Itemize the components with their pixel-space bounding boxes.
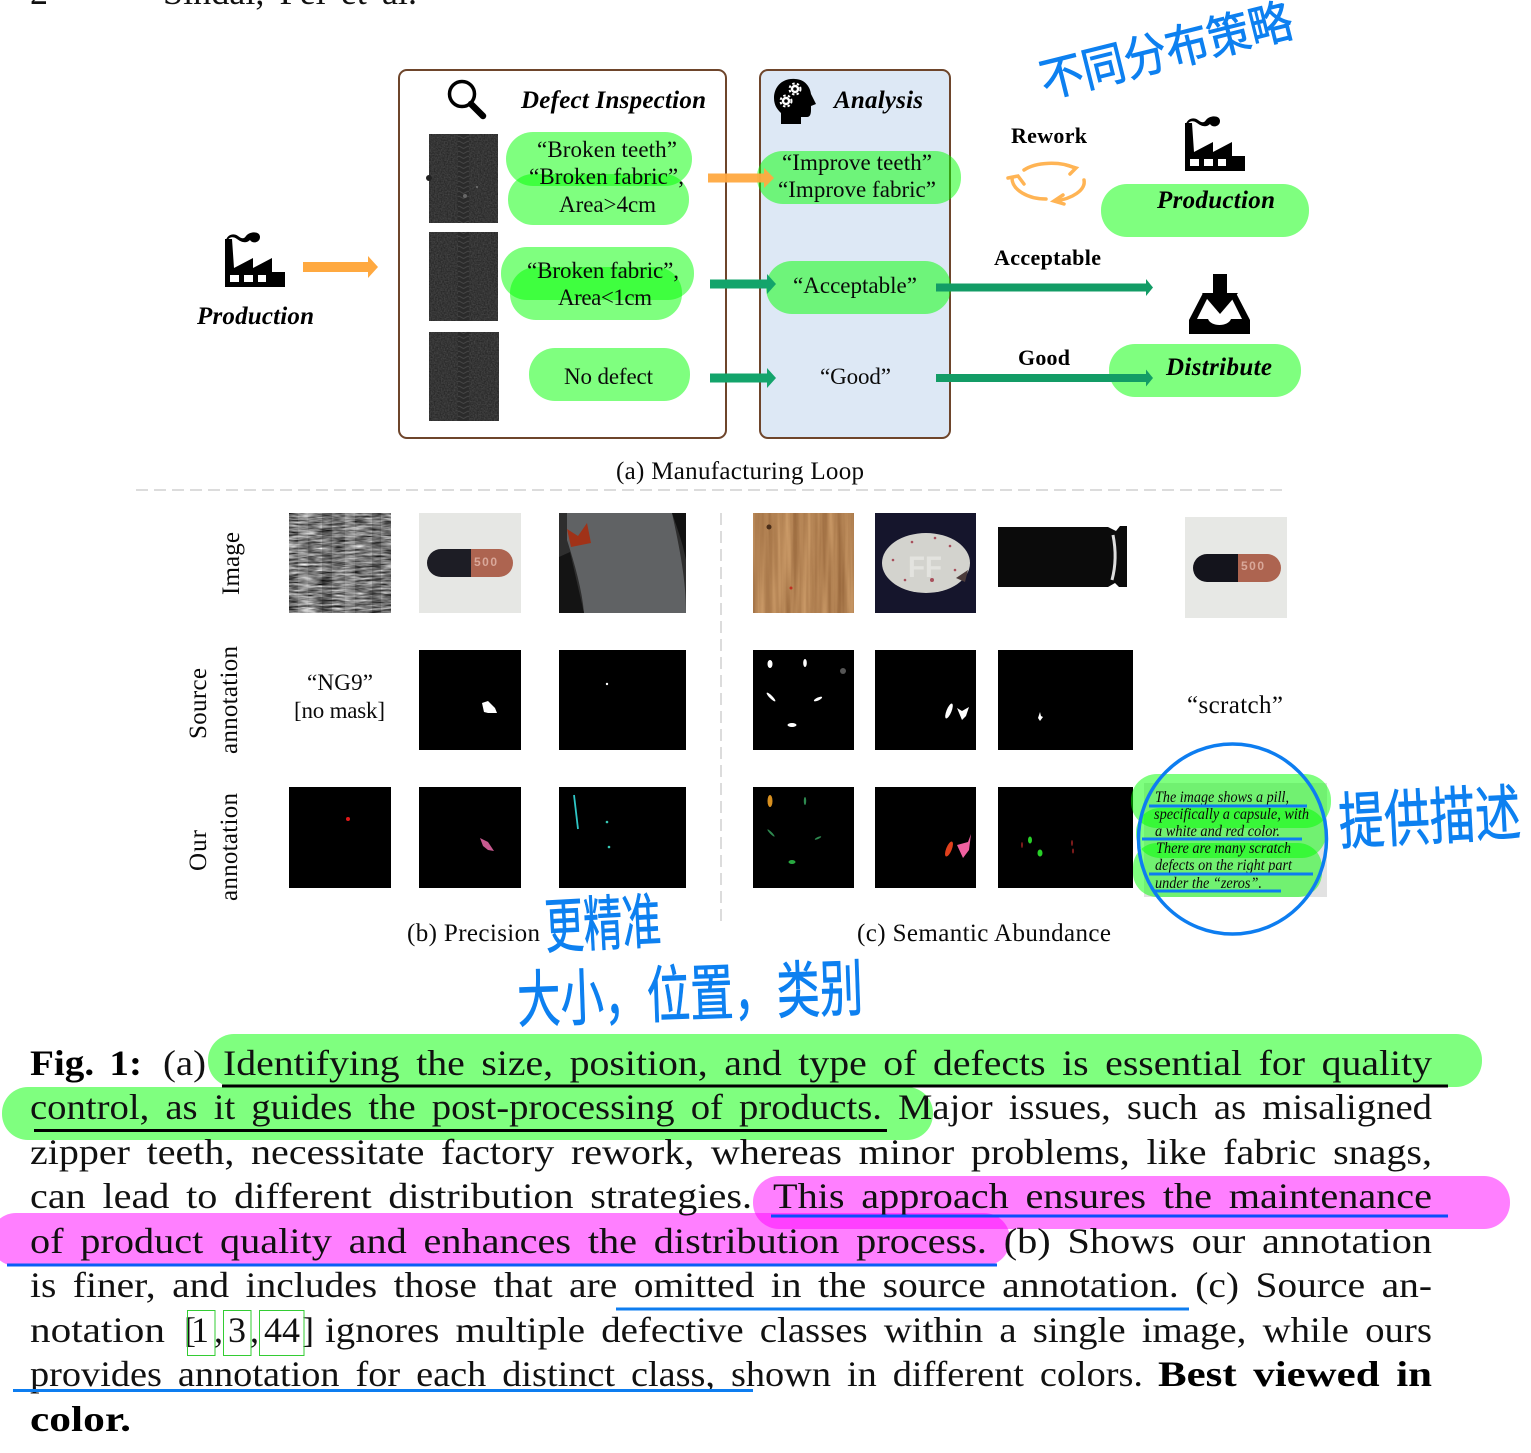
figure caption text: control, as it guides the post-processing of products. Major issues, such as misaligned [30, 1087, 1432, 1127]
analysis text: good: “Good” [820, 364, 891, 389]
figure caption text: 3 [228, 1310, 246, 1350]
image: capsule [419, 513, 521, 613]
arrow: inspection to improve [708, 168, 774, 188]
mask: fabric ours [289, 787, 391, 888]
finding text: broken teeth and fabric: Area>4cm [559, 192, 656, 217]
row labels [185, 532, 245, 901]
figure caption text: ignores multiple defective classes within a single image, while ours [325, 1310, 1432, 1350]
description underlines [1142, 806, 1313, 891]
arrow: acceptable to distribute [936, 279, 1153, 296]
heading: defect inspection: Defect Inspection [520, 87, 706, 114]
label: distribute: Distribute [1165, 354, 1272, 381]
finding text: broken teeth and fabric: “Broken teeth” [537, 137, 677, 162]
mask: tablet source [875, 650, 976, 750]
image: fabric texture [289, 513, 391, 613]
callout: generated description [1131, 744, 1331, 934]
highlight: improve [757, 151, 961, 204]
figure caption text: Identifying the size, position, and type of defects is essential for quality [223, 1043, 1432, 1083]
analysis text: improve: “Improve fabric” [778, 177, 936, 202]
image: zipper broken fabric [429, 232, 498, 321]
finding text: broken teeth and fabric: “Broken fabric”, [529, 164, 684, 189]
figure caption text: notation [30, 1310, 165, 1350]
analysis text: improve [778, 150, 936, 202]
running header [30, 0, 417, 12]
figure caption text: [ [184, 1310, 196, 1350]
handwritten note: size position type: 大小，位置，类别 [515, 938, 864, 1040]
icon: distribute inbox [1189, 274, 1250, 334]
handwritten note: more precise: 更精准 [542, 873, 663, 966]
source text: ng9 no mask [294, 670, 385, 723]
figure caption text: This approach ensures the maintenance [773, 1176, 1432, 1216]
figure caption text: , [250, 1310, 259, 1350]
finding text: broken fabric small: Area<1cm [558, 285, 652, 310]
finding text: no defect: No defect [564, 364, 654, 389]
figure caption text [30, 1043, 1432, 1439]
caption: precision: (b) Precision [407, 920, 540, 947]
figure caption text: (a) [163, 1043, 206, 1083]
figure caption text: Best viewed in [1158, 1354, 1432, 1394]
figure caption text: ] [302, 1310, 314, 1350]
mask: bottle source [998, 650, 1133, 750]
arrow: production to inspection [303, 256, 378, 278]
mask: wood source [753, 650, 854, 750]
icon: factory [225, 232, 285, 287]
image: capsule close-up: 500 [1241, 559, 1266, 573]
panel: production source [196, 232, 378, 330]
description text [1154, 789, 1309, 892]
finding text: broken fabric small: “Broken fabric”, [527, 258, 679, 283]
icon: head with gears [774, 79, 816, 124]
highlight: acceptable [766, 261, 951, 314]
mask: bottle ours [998, 787, 1133, 888]
description text: specifically a capsule, with [1154, 806, 1309, 823]
finding text: broken teeth and fabric [529, 137, 684, 217]
icon: rework loop [1008, 163, 1084, 204]
label: rework: Rework [1011, 123, 1088, 148]
image: zipper broken teeth [426, 134, 498, 223]
description text: The image shows a pill, [1155, 789, 1289, 806]
highlight: no defect [529, 348, 690, 401]
row labels: Image [218, 532, 245, 595]
source text: ng9 no mask: “NG9” [307, 670, 373, 695]
label: good: Good [1018, 345, 1070, 370]
caption: manufacturing loop: (a) Manufacturing Loop [616, 458, 864, 485]
image: tablet: FF [908, 551, 942, 584]
image: zipper no defect [429, 332, 499, 421]
figure caption text: , [214, 1310, 223, 1350]
arrow: good to distribute [936, 370, 1153, 386]
circle around description [1138, 744, 1326, 934]
image: black bottle [998, 526, 1127, 587]
caption underlines [7, 1086, 1448, 1390]
arrow: inspection to good [710, 368, 776, 388]
highlight: broken teeth [506, 132, 692, 225]
mask: capsule ours [419, 787, 521, 888]
image: capsule close-up [1185, 517, 1287, 618]
highlight: distribute [1109, 344, 1301, 397]
mask: wood ours [753, 787, 854, 888]
caption highlights [0, 1034, 1510, 1266]
row labels: Our [185, 829, 212, 871]
mask: grey part ours [559, 787, 686, 888]
description text: There are many scratch [1156, 840, 1291, 857]
panel: outcomes [936, 116, 1309, 397]
caption: semantic abundance: (c) Semantic Abundance [857, 920, 1111, 947]
arrow: inspection to acceptable [710, 274, 776, 294]
row labels: annotation [216, 792, 243, 901]
mask: grey part source [559, 650, 686, 750]
image: grey part with red mark [559, 513, 686, 613]
figure caption text: zipper teeth, necessitate factory rework, whereas minor problems, like fabric snags, [30, 1132, 1432, 1172]
figure caption text: is finer, and includes those that are omitted in the source annotation. (c) Source an- [30, 1265, 1432, 1305]
citation link boxes [188, 1310, 304, 1356]
mask: capsule source [419, 650, 521, 750]
figure caption text: Fig. 1: [30, 1043, 142, 1083]
description text: defects on the right part [1155, 857, 1292, 874]
highlight: production [1101, 184, 1309, 237]
text: scratch: “scratch” [1187, 692, 1283, 719]
finding text: broken fabric small [527, 258, 679, 310]
figure caption text: provides annotation for each distinct class, shown in different colors. [30, 1354, 1143, 1394]
figure caption text: can lead to different distribution strategies. [30, 1176, 752, 1216]
figure caption text: color. [30, 1399, 131, 1439]
mask: tablet ours [875, 787, 976, 888]
description text: a white and red color. [1155, 823, 1280, 840]
heading: analysis: Analysis [832, 87, 923, 114]
panel: semantic abundance images [753, 513, 1287, 947]
row labels: annotation [216, 646, 243, 754]
icon: magnifying glass [450, 82, 483, 116]
panel: precision images [289, 513, 686, 947]
icon: factory [1185, 116, 1245, 171]
highlight: broken fabric [501, 247, 694, 320]
label: acceptable: Acceptable [994, 245, 1101, 270]
panel: defect inspection [399, 70, 726, 438]
image: capsule: 500 [474, 555, 499, 569]
analysis text: acceptable: “Acceptable” [793, 273, 917, 298]
label: production: Production [196, 303, 314, 330]
image: tablet [875, 513, 976, 613]
source text: ng9 no mask: [no mask] [294, 698, 385, 723]
panel: analysis [757, 70, 961, 438]
analysis text: improve: “Improve teeth” [782, 150, 932, 175]
label: production: Production [1156, 187, 1275, 214]
figure caption text: of product quality and enhances the distribution process. (b) Shows our annotation [30, 1221, 1432, 1261]
image: wood [753, 513, 854, 613]
row labels: Source [185, 668, 212, 739]
figure caption text: 1 [191, 1310, 209, 1350]
description text: under the “zeros”. [1155, 875, 1262, 892]
figure caption text: 44 [264, 1310, 300, 1350]
